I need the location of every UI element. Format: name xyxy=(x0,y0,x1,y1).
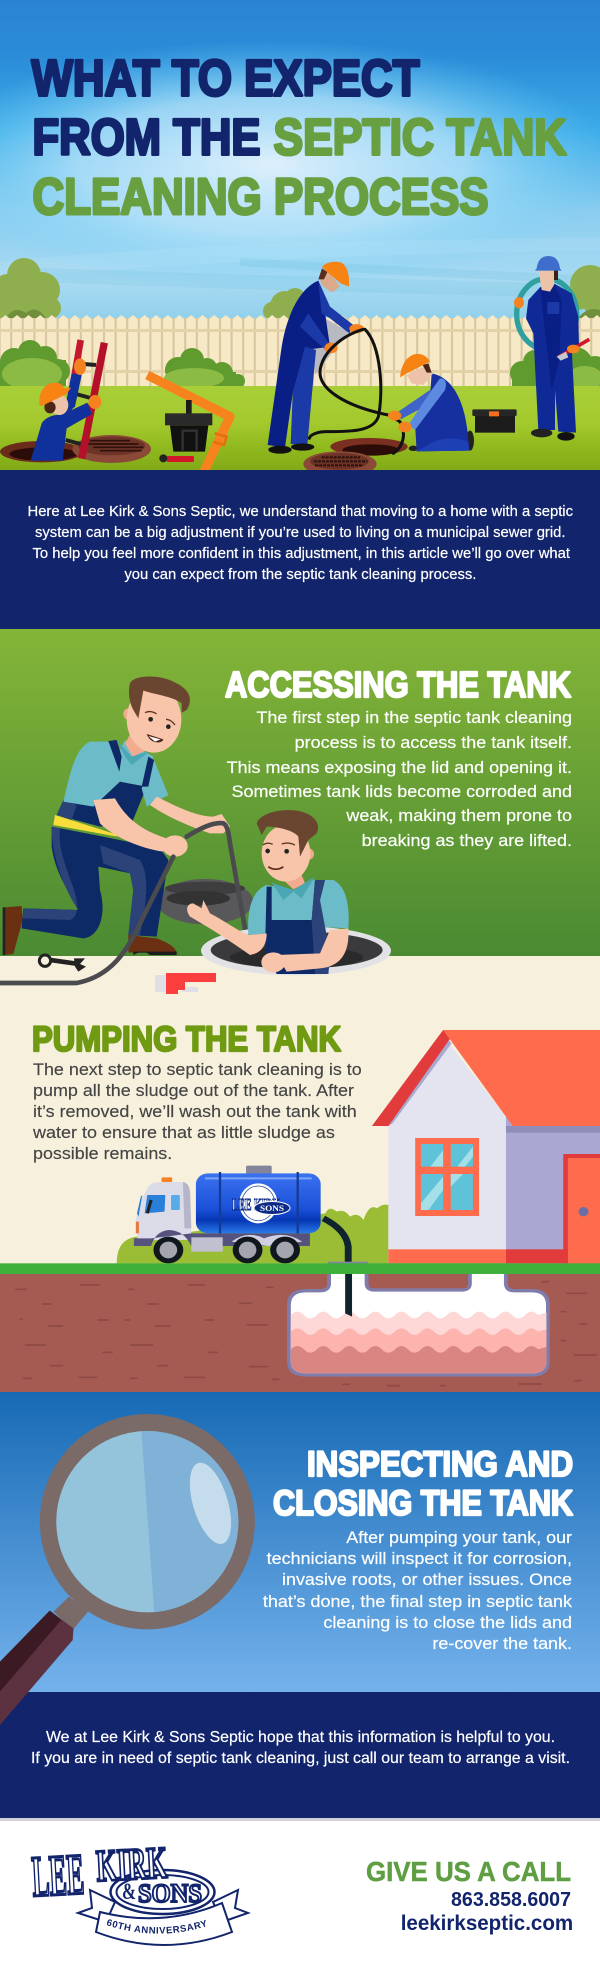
call to action: leekirkseptic.com xyxy=(401,1912,573,1935)
black hose xyxy=(309,329,403,453)
manhole cover xyxy=(303,451,377,477)
call to action: 863.858.6007 xyxy=(451,1889,571,1911)
kneeling worker xyxy=(388,354,474,451)
panel: accessing the tank xyxy=(0,629,600,1264)
logo oval xyxy=(110,1870,214,1914)
body text: accessing: weak, making them prone to xyxy=(345,806,572,825)
bushes xyxy=(0,340,600,390)
hose xyxy=(0,823,252,983)
panel: pumping the tank xyxy=(0,1020,600,1392)
body text: inspecting: re-cover the tank. xyxy=(432,1634,572,1653)
grass strip xyxy=(0,1263,600,1274)
septic truck xyxy=(134,1166,368,1264)
manhole lid left xyxy=(72,435,151,463)
technician in manhole xyxy=(187,810,349,974)
body text: accessing: process is to access the tank itself. xyxy=(295,733,572,752)
manhole left xyxy=(0,441,83,462)
window xyxy=(415,1138,479,1216)
body text: pumping: it’s removed, we’ll wash out the tank with xyxy=(33,1102,357,1121)
logo wordmark: KIRK xyxy=(95,1837,168,1891)
underground septic tank xyxy=(289,1263,548,1375)
worker body xyxy=(31,358,101,461)
door xyxy=(563,1154,600,1263)
call to action xyxy=(366,1856,573,1935)
title: SEPTIC TANK xyxy=(274,108,567,166)
logo wordmark xyxy=(30,1837,202,1909)
truck logo text xyxy=(232,1195,290,1214)
intro text: Here at Lee Kirk & Sons Septic, we understand that moving to a home with a septic xyxy=(28,503,573,520)
illustration: house truck and tank xyxy=(0,1030,600,1392)
title: FROM THE xyxy=(32,108,260,166)
house xyxy=(372,1030,600,1263)
standing worker with hose xyxy=(268,262,364,454)
ladder xyxy=(66,340,104,459)
panel: closing note xyxy=(0,1692,600,1821)
logo ribbon xyxy=(78,1890,248,1945)
worker with teal hose and wrench xyxy=(514,256,589,441)
body text: inspecting: invasive roots, or other issues. Once xyxy=(282,1570,572,1589)
title xyxy=(32,50,567,225)
bushes behind truck xyxy=(117,1205,388,1263)
workers group xyxy=(268,256,589,477)
panel: introduction xyxy=(0,470,600,629)
logo wordmark: & xyxy=(122,1879,136,1904)
logo wordmark: LEE xyxy=(30,1841,86,1909)
panel: inspecting and closing the tank xyxy=(0,1392,600,1692)
body text: accessing: Sometimes tank lids become corroded and xyxy=(232,782,572,801)
title: CLEANING PROCESS xyxy=(32,168,488,225)
suction pipe xyxy=(345,1274,352,1317)
closing text xyxy=(31,1729,570,1767)
grass xyxy=(0,386,600,470)
body text: inspecting: cleaning is to close the lids and xyxy=(323,1613,572,1632)
heading: inspecting xyxy=(273,1445,573,1523)
small wrench xyxy=(159,454,194,462)
body text: inspecting: After pumping your tank, our xyxy=(346,1528,572,1547)
call to action: GIVE US A CALL xyxy=(366,1856,571,1887)
body text: accessing: breaking as they are lifted. xyxy=(362,831,572,850)
body text: accessing: This means exposing the lid and opening it. xyxy=(227,758,572,777)
body text: pumping: The next step to septic tank cleaning is to xyxy=(33,1060,362,1079)
panel: footer xyxy=(30,1837,573,1946)
body text: inspecting: that’s done, the final step in septic tank xyxy=(263,1592,573,1611)
sky background xyxy=(0,0,600,470)
orange pipe xyxy=(147,375,230,472)
truck logo text: SONS xyxy=(260,1204,285,1213)
hose to tank xyxy=(323,1218,348,1316)
black wrench xyxy=(39,955,86,972)
kneeling technician xyxy=(3,676,230,955)
company logo xyxy=(30,1837,251,1946)
open lid xyxy=(157,879,253,924)
anniversary text: 60TH ANNIVERSARY xyxy=(107,1919,206,1934)
manhole right xyxy=(330,438,408,456)
body text: inspecting: technicians will inspect it for corrosion, xyxy=(267,1549,572,1568)
body text: pumping: possible remains. xyxy=(33,1144,172,1163)
intro text: To help you feel more confident in this adjustment, in this article we’ll go over what xyxy=(32,545,571,562)
black bucket xyxy=(165,400,212,452)
manhole opening xyxy=(201,926,391,975)
sludge layers xyxy=(291,1312,546,1373)
intro text: you can expect from the septic tank cleaning process. xyxy=(124,566,476,583)
body text: pumping: pump all the sludge out of the tank. After xyxy=(33,1081,354,1100)
red pipe wrench xyxy=(155,973,216,994)
fence xyxy=(0,315,600,387)
trees xyxy=(0,258,600,321)
body text: inspecting xyxy=(263,1528,573,1653)
body text: pumping xyxy=(32,1060,362,1163)
body text: pumping: water to ensure that as little sludge as xyxy=(32,1123,335,1142)
closing text: We at Lee Kirk & Sons Septic hope that this information is helpful to you. xyxy=(46,1729,555,1746)
closing text: If you are in need of septic tank cleaning, just call our team to arrange a visit. xyxy=(31,1750,570,1767)
illustration: two technicians at manhole xyxy=(0,676,391,983)
title: WHAT TO EXPECT xyxy=(32,50,420,106)
body text: accessing xyxy=(227,708,572,850)
tank logo xyxy=(239,1183,277,1223)
hero panel xyxy=(0,0,600,477)
soil xyxy=(0,1274,600,1392)
icon: magnifying glass xyxy=(0,1414,268,1725)
logo wordmark: SONS xyxy=(138,1879,202,1908)
toolbox xyxy=(472,409,517,433)
heading: pumping the tank: PUMPING THE TANK xyxy=(32,1020,341,1059)
body text: accessing: The first step in the septic tank cleaning xyxy=(256,708,572,727)
intro text: system can be a big adjustment if you’re used to living on a municipal sewer grid. xyxy=(35,524,566,541)
truck logo text: LEE KIRK xyxy=(232,1195,280,1214)
intro text xyxy=(28,503,573,583)
worker climbing ladder xyxy=(0,340,230,472)
heading: inspecting: INSPECTING AND xyxy=(307,1445,573,1484)
